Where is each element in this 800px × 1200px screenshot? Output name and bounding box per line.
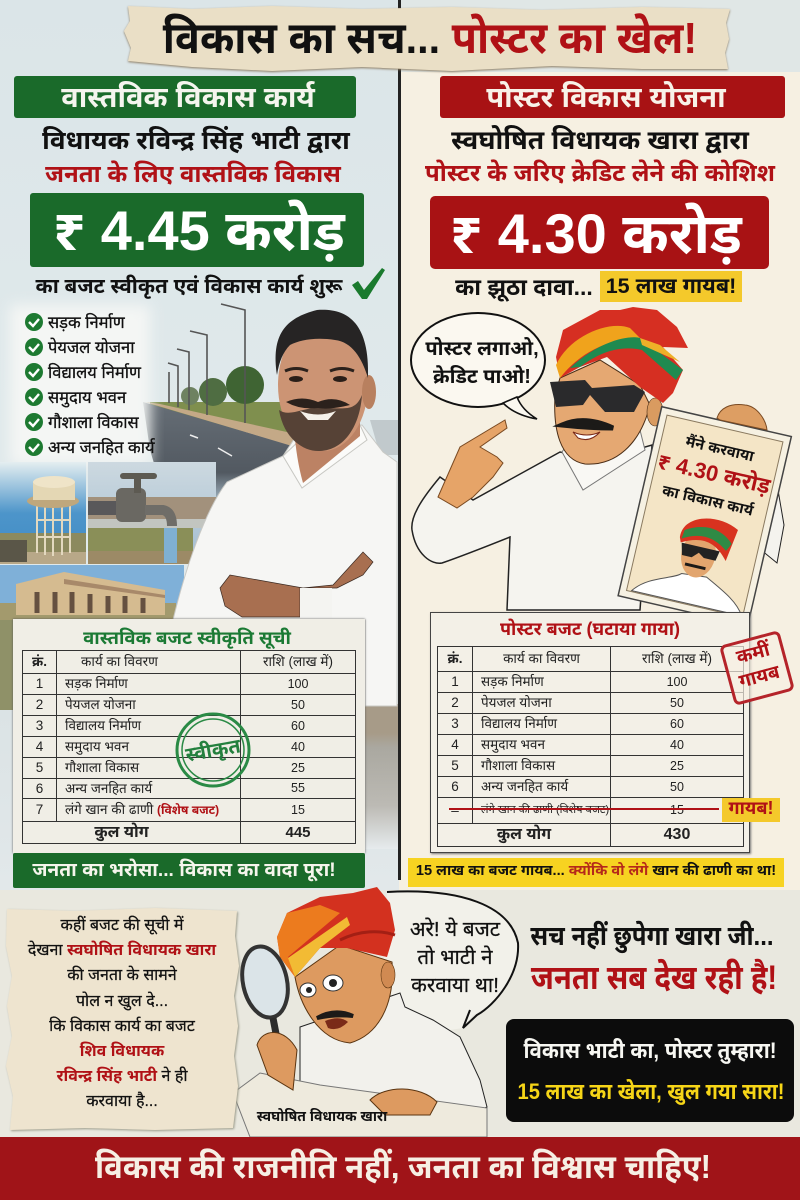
yellow missing tag: [722, 798, 780, 822]
right budget table: गौशाला विकास: [481, 758, 555, 773]
stamp: approved: स्वीकृत: [184, 733, 243, 768]
left budget table: क्रं.: [32, 654, 47, 669]
left budget table: विद्यालय निर्माण: [65, 718, 141, 733]
red heading: [440, 76, 785, 118]
note text: [28, 915, 216, 1110]
icon: school building photo: [0, 565, 184, 620]
right budget table: 4: [451, 737, 459, 752]
list items: सड़क निर्माण: [48, 314, 125, 332]
right panel background: [399, 0, 800, 890]
strikethrough line: [449, 808, 719, 810]
speech text: poster: क्रेडिट पाओ!: [433, 366, 531, 388]
speech text: detective: अरे! ये बजट: [410, 918, 500, 941]
poster held by man: मैंने करवाया: [684, 432, 756, 466]
left margin ground: [0, 620, 13, 710]
right budget table: राशि (लाख में): [642, 651, 712, 666]
left budget panel: [13, 619, 365, 853]
list items: पेयजल योजना: [48, 339, 134, 357]
left budget table: अन्य जनहित कार्य: [65, 781, 152, 796]
note text: कि विकास कार्य का बजट: [49, 1018, 195, 1035]
cartoon man with turban: [412, 307, 784, 610]
green amount box: [30, 193, 364, 267]
poster held by man: [618, 407, 791, 626]
note text: करवाया है...: [86, 1093, 158, 1110]
top sky strip right: [399, 0, 800, 72]
icon: water tower photo: [0, 462, 86, 564]
right budget table: पेयजल योजना: [481, 695, 552, 710]
left budget table: 2: [36, 697, 43, 712]
yellow footer banner: [408, 858, 784, 887]
amount text: ₹ 4.30 करोड़: [450, 202, 742, 265]
right subtitle: स्वघोषित विधायक खारा द्वारा: [451, 125, 749, 155]
right budget table: 25: [670, 759, 684, 773]
right budget table: कुल योग: [497, 826, 551, 843]
truth headline: सच नहीं छुपेगा खारा जी...: [530, 921, 774, 951]
amount text: ₹ 4.45 करोड़: [53, 199, 345, 262]
footer text: जनता का भरोसा... विकास का वादा पूरा!: [32, 860, 336, 881]
poster held by man: का विकास कार्य: [661, 481, 756, 520]
icon: big check mark: [352, 268, 385, 299]
bottom banner text: विकास की राजनीति नहीं, जनता का विश्वास चाहिए!: [95, 1148, 711, 1185]
right budget table: 50: [670, 780, 684, 794]
false claim line: का झूठा दावा...: [455, 274, 593, 300]
list items: अन्य जनहित कार्य: [48, 439, 155, 457]
stamp: approved: [176, 712, 250, 788]
right budget table: 60: [670, 717, 684, 731]
list items: विद्यालय निर्माण: [48, 364, 141, 382]
speech text: poster: पोस्टर लगाओ,: [425, 338, 539, 360]
left budget table: पेयजल योजना: [65, 697, 136, 712]
speech bubble: detective: [380, 891, 518, 1030]
green heading text: वास्तविक विकास कार्य: [61, 82, 315, 114]
red amount box: [430, 196, 769, 269]
left table title: वास्तविक बजट स्वीकृति सूची: [83, 627, 291, 648]
left budget table: राशि (लाख में): [263, 654, 333, 669]
right table title: पोस्टर बजट (घटाया गाया): [500, 619, 680, 639]
right budget table: सड़क निर्माण: [481, 674, 544, 689]
public watching headline: जनता सब देख रही है!: [531, 959, 777, 997]
right budget table: 50: [670, 696, 684, 710]
note text: की जनता के सामने: [67, 967, 177, 984]
torn paper: [122, 6, 731, 74]
stamp text: [734, 638, 782, 693]
white slogan: विकास भाटी का, पोस्टर तुम्हारा!: [523, 1038, 777, 1063]
note text: रविन्द्र सिंह भाटी ने ही: [56, 1068, 188, 1085]
left budget table: 55: [291, 781, 305, 795]
left budget table: 4: [36, 739, 43, 754]
right budget panel: [430, 612, 750, 853]
list items: समुदाय भवन: [48, 389, 126, 407]
right red subtitle: पोस्टर के जरिए क्रेडिट लेने की कोशिश: [425, 160, 775, 187]
left budget table: 100: [288, 677, 308, 691]
left footer banner: [13, 853, 365, 888]
left budget table: 5: [36, 760, 43, 775]
note text: कहीं बजट की सूची में: [61, 917, 183, 934]
speech text: detective: तो भाटी ने: [417, 946, 493, 969]
title banner: [122, 6, 731, 74]
red heading text: पोस्टर विकास योजना: [486, 82, 726, 114]
yellow text: 15 लाख गायब!: [606, 274, 736, 298]
right budget table: 430: [664, 826, 690, 843]
title text: विकास का सच... पोस्टर का खेल!: [163, 14, 697, 63]
hand on poster: [717, 405, 767, 430]
fog behind list: [10, 305, 150, 465]
right budget table: 15: [670, 803, 684, 817]
stamp text: गायब: [737, 662, 782, 693]
left budget table: कार्य का विवरण: [81, 654, 158, 669]
icon: water tap photo: [88, 462, 216, 564]
left budget table: लंगे खान की ढाणी (विशेष बजट): [65, 802, 219, 817]
stamp text: कमीं: [734, 639, 772, 669]
right budget table: अन्य जनहित कार्य: [481, 779, 568, 794]
man in white kurta: [173, 310, 397, 706]
right budget table: 40: [670, 738, 684, 752]
speech text: poster: [425, 337, 539, 388]
strip behind left panel: [365, 704, 399, 849]
black slogan box: [506, 1019, 794, 1122]
tag text: गायब!: [729, 798, 773, 818]
right budget table: –: [451, 803, 459, 818]
bottom banner: [0, 1137, 800, 1200]
list items: [48, 312, 155, 457]
right budget table: 3: [451, 716, 459, 731]
right budget table: 1: [451, 674, 459, 689]
left budget table: [22, 650, 356, 844]
left red subtitle: जनता के लिए वास्तविक विकास: [45, 161, 341, 188]
works checklist: [25, 312, 155, 457]
left subtitle: विधायक रविन्द्र सिंह भाटी द्वारा: [42, 125, 350, 155]
speech text: detective: [410, 917, 500, 997]
left budget table: कुल योग: [94, 824, 149, 840]
left budget table: 3: [36, 718, 43, 733]
right budget table: 5: [451, 758, 459, 773]
left budget table: 6: [36, 781, 43, 796]
speech text: detective: करवाया था!: [411, 974, 499, 997]
left budget table: 50: [291, 698, 305, 712]
right budget table: 2: [451, 695, 459, 710]
right budget table: 6: [451, 779, 459, 794]
road scene: [143, 304, 399, 500]
left budget table: 25: [291, 761, 305, 775]
approval line: का बजट स्वीकृत एवं विकास कार्य शुरू: [36, 275, 342, 298]
yellow slogan: 15 लाख का खेला, खुल गया सारा!: [518, 1079, 784, 1104]
left budget table: 7: [36, 802, 43, 817]
centre divider: [398, 0, 401, 880]
left budget table: 15: [291, 803, 305, 817]
yellow missing box: [600, 271, 742, 302]
right budget table: क्रं.: [448, 651, 462, 666]
left budget table: सड़क निर्माण: [65, 676, 128, 691]
left budget table: 40: [291, 740, 305, 754]
speech bubble: poster: [411, 313, 545, 419]
note text: पोल न खुल दे...: [76, 993, 168, 1010]
right budget table: लंगे खान की ढाणी (विशेष बजट): [481, 804, 609, 816]
yellow footer text: 15 लाख का बजट गायब... क्योंकि वो लंगे खान की ढाणी का था!: [416, 863, 776, 879]
left budget table: गौशाला विकास: [65, 760, 139, 775]
left budget table: 60: [291, 719, 305, 733]
note text: शिव विधायक: [80, 1043, 164, 1060]
right budget table: [437, 646, 744, 847]
note text: देखना स्वघोषित विधायक खारा: [28, 942, 216, 959]
poster held by man: ₹ 4.30 करोड़: [655, 449, 773, 500]
right budget table: कार्य का विवरण: [503, 651, 580, 666]
right budget table: 100: [667, 675, 687, 689]
left budget table: 1: [36, 676, 43, 691]
left budget table: 445: [285, 824, 311, 841]
right budget table: विद्यालय निर्माण: [481, 716, 557, 731]
caption under detective: स्वघोषित विधायक खारा: [257, 1108, 387, 1124]
list items: गौशाला विकास: [48, 414, 139, 432]
right budget table: समुदाय भवन: [481, 737, 545, 752]
torn note paper: [6, 908, 242, 1132]
detective man with magnifier: [233, 887, 487, 1137]
left panel background: [0, 0, 399, 890]
stamp: missing: [719, 630, 795, 706]
green heading: [14, 76, 356, 118]
left budget table: समुदाय भवन: [65, 739, 129, 754]
